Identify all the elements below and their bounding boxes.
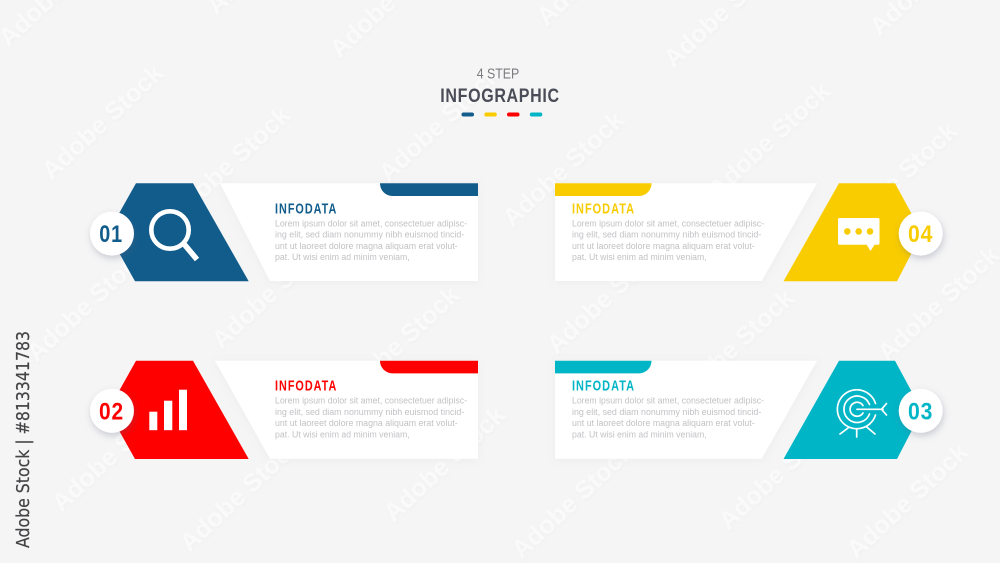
body text: step 01: ing elit, sed diam nonummy nibh euismod tincid-: [275, 230, 464, 241]
accent tab: step 02: [380, 361, 478, 373]
watermark pattern: Adobe Stock: [506, 438, 639, 563]
body text: step 02: ing elit, sed diam nonummy nibh euismod tincid-: [275, 407, 464, 418]
title: infographic: INFOGRAPHIC: [440, 85, 560, 107]
title block: [440, 66, 560, 116]
body text: step 03: unt ut laoreet dolore magna aliquam erat volut-: [572, 418, 755, 429]
panel: step 04: [555, 183, 943, 281]
body text: step 02: Lorem ipsum dolor sit amet, consectetuer adipisc-: [275, 396, 467, 407]
body text: step 03: Lorem ipsum dolor sit amet, consectetuer adipisc-: [572, 396, 764, 407]
body text: step 04: Lorem ipsum dolor sit amet, consectetuer adipisc-: [572, 218, 764, 229]
body text: step 02: unt ut laoreet dolore magna aliquam erat volut-: [275, 418, 458, 429]
body text: step 04: ing elit, sed diam nonummy nibh euismod tincid-: [572, 230, 761, 241]
icon: magnifier: [151, 211, 197, 260]
watermark pattern: Adobe Stock: [713, 409, 846, 535]
watermark pattern: Adobe Stock: [378, 401, 511, 527]
body text: step 03: pat. Ut wisi enim ad minim veniam,: [572, 430, 707, 440]
watermark pattern: Adobe Stock: [667, 284, 800, 410]
heading: step 03: INFODATA: [572, 378, 635, 395]
watermark pattern: Adobe Stock: [703, 77, 836, 203]
panel: step 02: [90, 361, 478, 459]
card: step 01: [220, 183, 478, 281]
hexagon: step 02: [108, 361, 249, 459]
panel: step 03: [555, 361, 943, 459]
number badge: 04: [899, 212, 943, 256]
accent tab: step 01: [380, 183, 478, 196]
hexagon: step 04: [784, 183, 922, 281]
watermark pattern: Adobe Stock: [497, 106, 630, 232]
number badge: 02: [90, 389, 134, 433]
watermark pattern: Adobe Stock: [174, 431, 307, 557]
number badge: 04: 04: [908, 221, 933, 248]
watermark pattern: Adobe Stock: [206, 228, 339, 354]
card: step 04: [555, 183, 817, 281]
title: 4 step: 4 STEP: [477, 66, 519, 82]
hexagon: step 03: [784, 361, 922, 459]
card: step 03: [555, 361, 817, 459]
card: step 02: [215, 361, 478, 459]
body text: step 03: [572, 396, 764, 440]
watermark pattern: Adobe Stock: [46, 391, 179, 517]
body text: step 04: unt ut laoreet dolore magna aliquam erat volut-: [572, 241, 755, 252]
watermark pattern: Adobe Stock: [541, 233, 674, 359]
accent tab: step 03: [555, 361, 652, 373]
watermark pattern: Adobe Stock: [373, 61, 506, 187]
watermark pattern: Adobe Stock: [872, 241, 1000, 367]
body text: step 01: pat. Ut wisi enim ad minim veniam,: [275, 252, 410, 263]
watermark pattern: Adobe Stock: [163, 101, 296, 227]
number badge: 03: 03: [908, 398, 933, 425]
number badge: 01: [90, 212, 134, 256]
body text: step 01: unt ut laoreet dolore magna aliquam erat volut-: [275, 241, 458, 252]
watermark pattern: Adobe Stock: [841, 438, 974, 563]
heading: step 02: INFODATA: [275, 378, 337, 395]
stock id label: Adobe Stock | #813341783: [14, 331, 34, 548]
panel: step 01: [90, 183, 478, 281]
number badge: 01: 01: [99, 221, 123, 248]
watermark pattern: Adobe Stock: [21, 241, 154, 367]
watermark pattern: Adobe Stock: [36, 59, 169, 185]
heading: step 01: INFODATA: [275, 200, 337, 217]
icon: bar chart: [149, 390, 187, 430]
accent tab: step 04: [555, 183, 652, 196]
body text: step 03: ing elit, sed diam nonummy nibh euismod tincid-: [572, 407, 761, 418]
body text: step 01: [275, 218, 467, 263]
heading: step 04: INFODATA: [572, 200, 635, 217]
body text: step 01: Lorem ipsum dolor sit amet, consectetuer adipisc-: [275, 218, 467, 229]
colour dashes: [462, 112, 542, 116]
body text: step 02: pat. Ut wisi enim ad minim veniam,: [275, 430, 410, 440]
number badge: 03: [899, 389, 943, 433]
watermark pattern: Adobe Stock: [332, 281, 465, 407]
body text: step 04: pat. Ut wisi enim ad minim veniam,: [572, 252, 707, 263]
icon: target with arrow: [837, 390, 886, 437]
icon: speech bubble: [838, 218, 880, 251]
watermark pattern: Adobe Stock: [830, 117, 963, 243]
number badge: 02: 02: [99, 398, 124, 425]
hexagon: step 01: [108, 183, 249, 281]
body text: step 02: [275, 396, 467, 440]
body text: step 04: [572, 218, 764, 263]
